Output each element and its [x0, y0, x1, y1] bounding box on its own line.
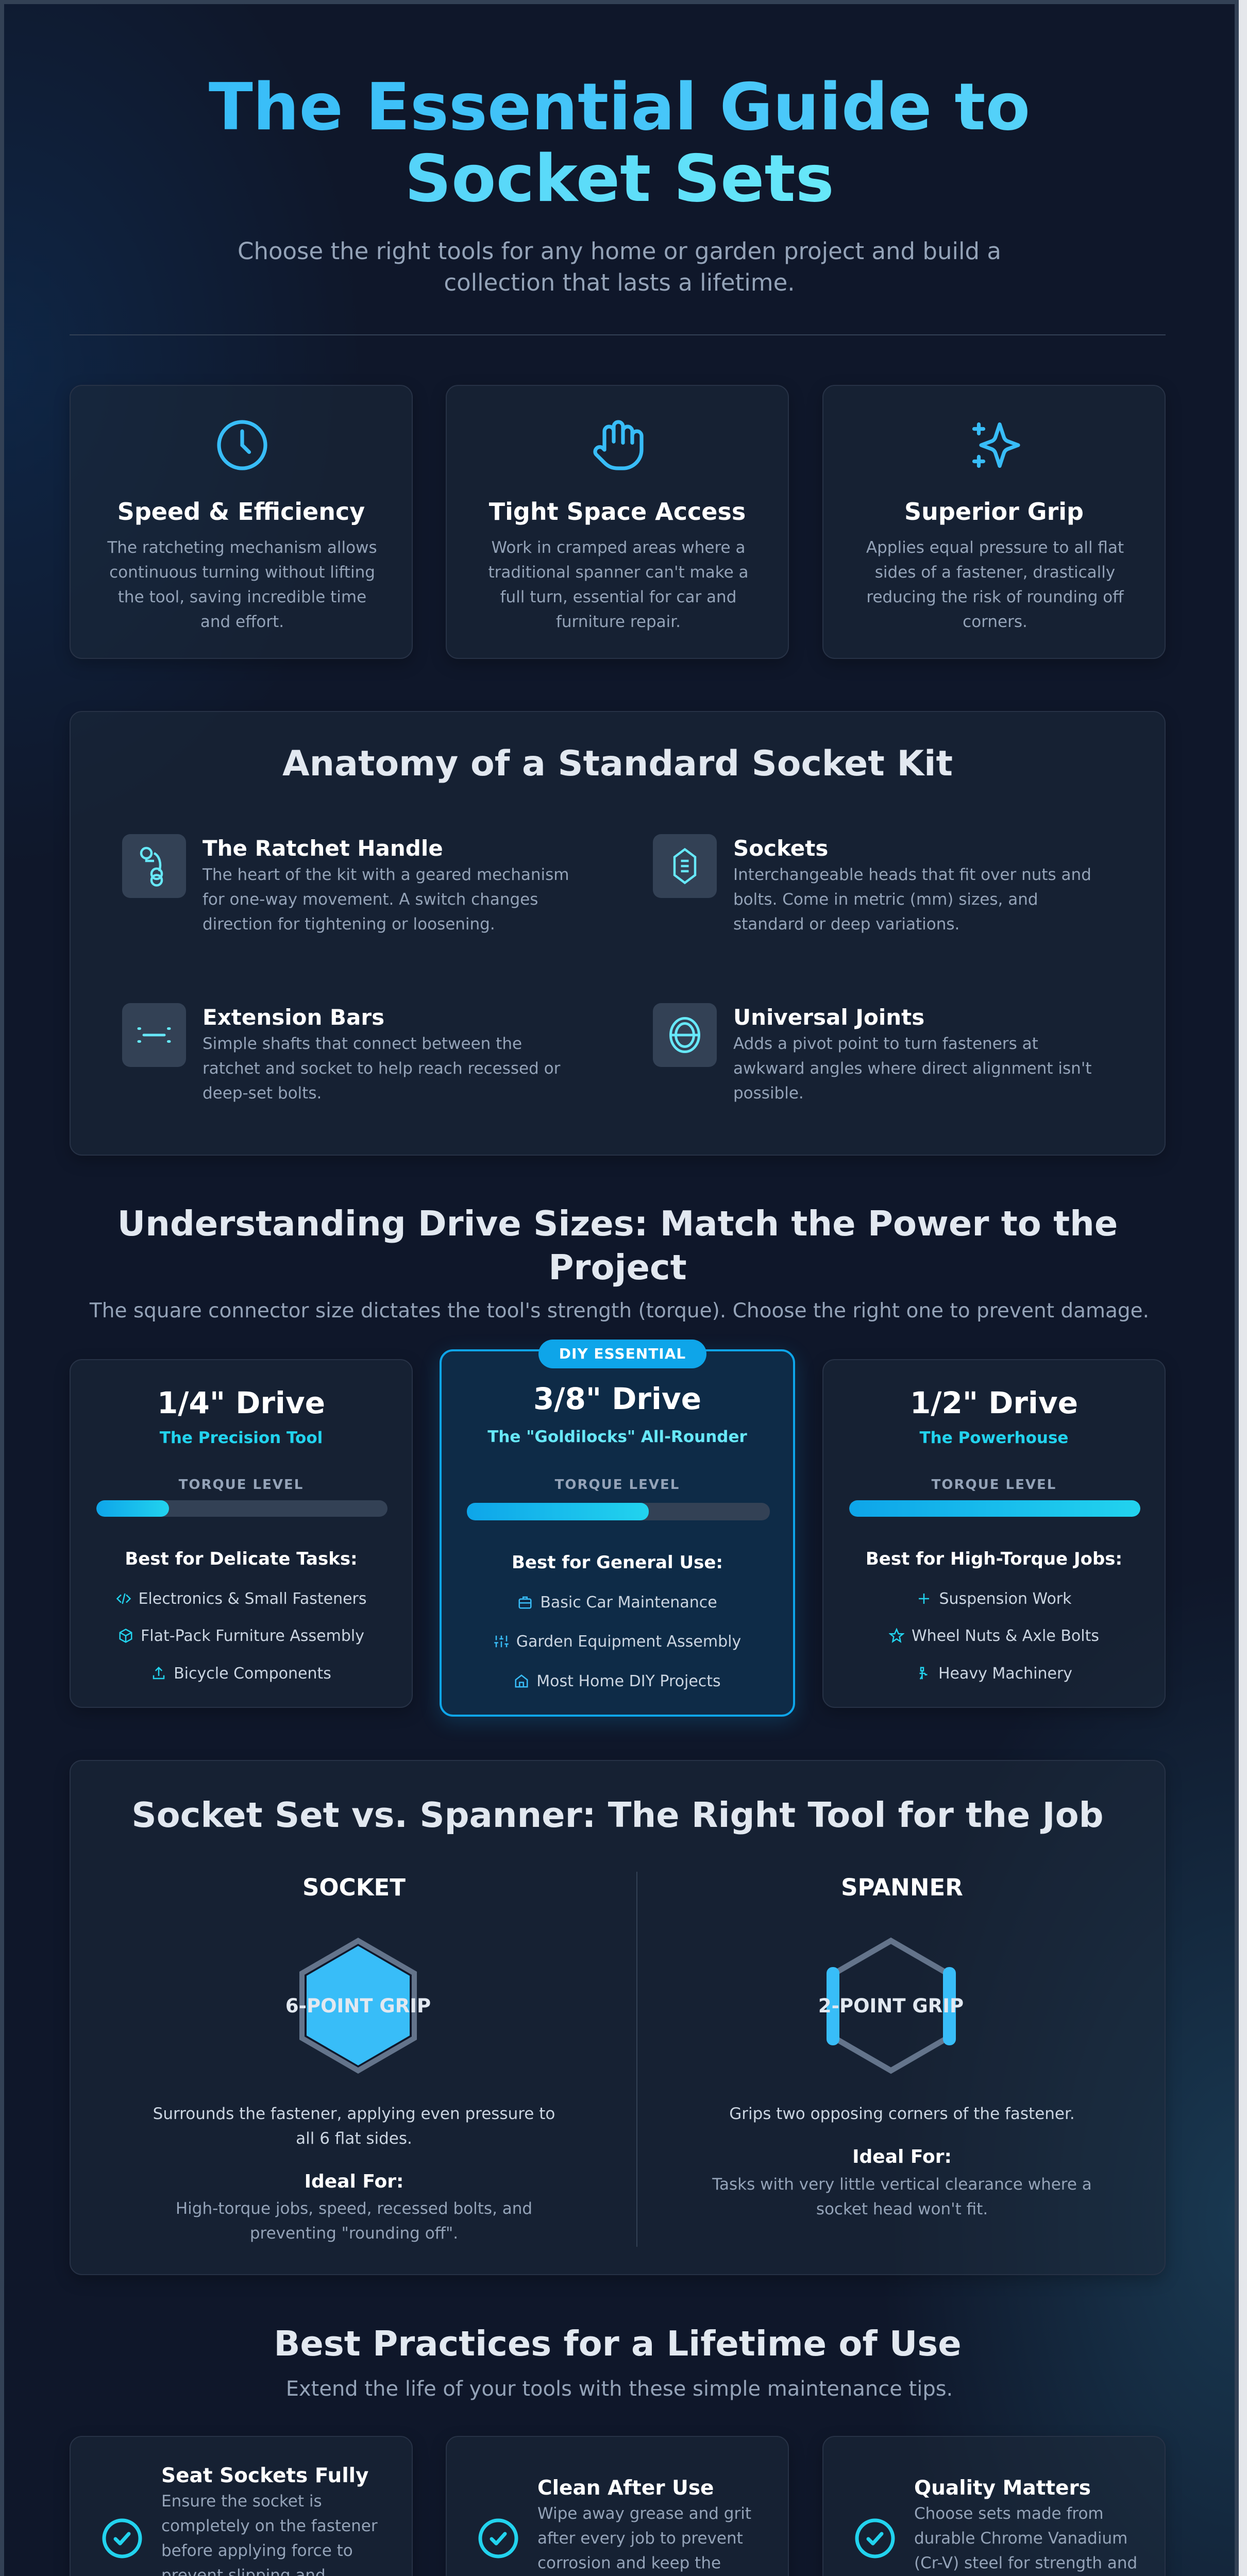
column: socket	[153, 1874, 555, 2243]
item: extension bars	[122, 1003, 561, 1103]
subtitle: drive sizes: The square connector size dictates the tool's strength (torque). Choose the right one to prevent damage.	[90, 1299, 1149, 1323]
title: Socket Sets	[405, 141, 834, 216]
icon: clock	[217, 420, 267, 470]
bar: torque 60%	[467, 1503, 770, 1520]
card: 1/4 drive: 1/4" Drive	[157, 1385, 325, 1420]
item: ratchet handle	[122, 834, 569, 934]
card: tight space	[446, 385, 789, 659]
item: extension bars: Simple shafts that connect between the ratchet and socket to help reach recessed or deep-set bolts.	[203, 1035, 560, 1103]
subtitle: best practices: Extend the life of your tools with these simple maintenance tips.	[286, 2377, 953, 2401]
card: grip: Superior Grip	[904, 498, 1084, 526]
icon: socket hexagon	[285, 1938, 431, 2074]
panel: socket vs spanner	[70, 1760, 1166, 2275]
heading: versus: Socket Set vs. Spanner: The Right Tool for the Job	[131, 1795, 1104, 1835]
heading: anatomy: Anatomy of a Standard Socket Kit	[282, 743, 953, 784]
item: ratchet handle: The Ratchet Handle	[203, 836, 443, 861]
column: spanner: SPANNER	[841, 1874, 963, 1901]
card: 3/8 drive (highlighted): Best for General Use:	[512, 1552, 723, 1573]
card: 1/2 drive	[822, 1359, 1166, 1708]
heading: best practices: Best Practices for a Lifetime of Use	[274, 2324, 962, 2364]
panel: anatomy	[70, 711, 1166, 1156]
icon: sparkles	[972, 422, 1020, 468]
list: high torque: Heavy Machinery	[938, 1664, 1072, 1683]
tip: clean: Clean After Use	[537, 2476, 714, 2500]
item: extension bars: Extension Bars	[203, 1005, 384, 1030]
card: 1/2 drive: 1/2" Drive	[910, 1385, 1078, 1420]
column: spanner: Ideal For:	[852, 2146, 952, 2167]
column: spanner: Grips two opposing corners of the fastener.	[729, 2105, 1075, 2123]
icon: hand	[593, 420, 644, 470]
icon: extension	[122, 1003, 186, 1067]
card: grip: Applies equal pressure to all flat sides of a fastener, drastically reducing the risk of rounding off corners.	[866, 538, 1124, 631]
list: high torque	[889, 1590, 1099, 1683]
icon: check	[102, 2518, 142, 2558]
card: speed	[70, 385, 413, 659]
icon: spanner hexagon: 2-POINT GRIP	[818, 1995, 964, 2017]
item: sockets: Interchangeable heads that fit over nuts and bolts. Come in metric (mm) sizes, and standard or deep variations.	[733, 866, 1091, 934]
icon: ratchet	[122, 834, 186, 898]
column: socket: SOCKET	[302, 1874, 406, 1901]
card: 3/8 drive (highlighted): The "Goldilocks" All-Rounder	[487, 1428, 747, 1446]
item: sockets	[653, 834, 1091, 934]
panel: tips	[70, 2436, 1166, 2576]
card: 1/2 drive: The Powerhouse	[920, 1429, 1068, 1447]
list: delicate tasks: Electronics & Small Fasteners	[138, 1590, 367, 1607]
item: universal joints: Adds a pivot point to turn fasteners at awkward angles where direct alignment isn't possible.	[733, 1035, 1092, 1103]
subtitle: Choose the right tools for any home or garden project and build a collection that lasts a lifetime.	[238, 238, 1001, 296]
card: 1/4 drive: Best for Delicate Tasks:	[125, 1549, 358, 1569]
item: ratchet handle: The heart of the kit with a geared mechanism for one-way movement. A switch changes direction for tightening or loosening.	[203, 866, 569, 934]
column: socket: Ideal For:	[305, 2171, 403, 2192]
bar: torque 25%	[96, 1500, 387, 1517]
card: tight space: Work in cramped areas where a traditional spanner can't make a full turn, essential for car and furniture repair.	[488, 538, 748, 631]
column: spanner	[712, 1874, 1092, 2218]
panel: feature cards	[70, 385, 1166, 662]
card: 3/8 drive (highlighted): TORQUE LEVEL	[555, 1477, 680, 1493]
title	[209, 69, 1030, 216]
item: universal joints: Universal Joints	[733, 1005, 924, 1030]
card: 1/4 drive: The Precision Tool	[160, 1429, 323, 1447]
item: universal joints	[653, 1003, 1092, 1103]
icon: socket hexagon: 6-POINT GRIP	[285, 1995, 431, 2017]
list: delicate tasks	[116, 1590, 367, 1683]
card: speed: The ratcheting mechanism allows continuous turning without lifting the tool, saving incredible time and effort.	[107, 538, 377, 631]
list: general use	[494, 1593, 741, 1690]
badge: DIY essential	[538, 1340, 706, 1368]
list: general use: Garden Equipment Assembly	[516, 1632, 741, 1651]
column: spanner: Tasks with very little vertical clearance where a socket head won't fit.	[712, 2175, 1092, 2218]
tip: clean	[446, 2436, 789, 2576]
tip: seat sockets: Seat Sockets Fully	[161, 2464, 368, 2487]
list: delicate tasks: Flat-Pack Furniture Assembly	[141, 1627, 364, 1645]
card: 1/4 drive: TORQUE LEVEL	[179, 1477, 304, 1493]
list: delicate tasks: Bicycle Components	[174, 1664, 331, 1683]
card: 1/2 drive: TORQUE LEVEL	[932, 1477, 1056, 1493]
icon: spanner hexagon	[818, 1937, 964, 2074]
card: grip	[822, 385, 1166, 659]
card: 3/8 drive (highlighted)	[440, 1349, 795, 1717]
card: tight space: Tight Space Access	[489, 498, 746, 526]
list: high torque: Wheel Nuts & Axle Bolts	[912, 1627, 1099, 1645]
badge: DIY essential: DIY ESSENTIAL	[559, 1345, 686, 1362]
icon: check	[478, 2518, 518, 2558]
card: speed: Speed & Efficiency	[117, 498, 365, 526]
card: 3/8 drive (highlighted): 3/8" Drive	[533, 1381, 701, 1416]
item: sockets: Sockets	[733, 836, 828, 861]
column: socket: High-torque jobs, speed, recessed bolts, and preventing "rounding off".	[176, 2199, 532, 2243]
bar: torque 100%	[849, 1500, 1140, 1517]
icon: check	[855, 2518, 895, 2558]
card: 1/2 drive: Best for High-Torque Jobs:	[866, 1549, 1122, 1569]
title: The Essential Guide to	[209, 69, 1030, 145]
heading: drive sizes: Understanding Drive Sizes: Match the Power to the Project	[117, 1204, 1118, 1287]
list: general use: Most Home DIY Projects	[536, 1672, 721, 1690]
tip: quality	[822, 2436, 1166, 2576]
icon: joint	[653, 1003, 717, 1067]
tip: quality: Quality Matters	[914, 2476, 1091, 2500]
column: socket: Surrounds the fastener, applying even pressure to all 6 flat sides.	[153, 2105, 555, 2148]
icon: socket	[653, 834, 717, 898]
list: high torque: Suspension Work	[939, 1590, 1072, 1607]
card: 1/4 drive	[70, 1359, 413, 1708]
list: general use: Basic Car Maintenance	[540, 1593, 717, 1612]
tip: seat sockets	[70, 2436, 413, 2576]
